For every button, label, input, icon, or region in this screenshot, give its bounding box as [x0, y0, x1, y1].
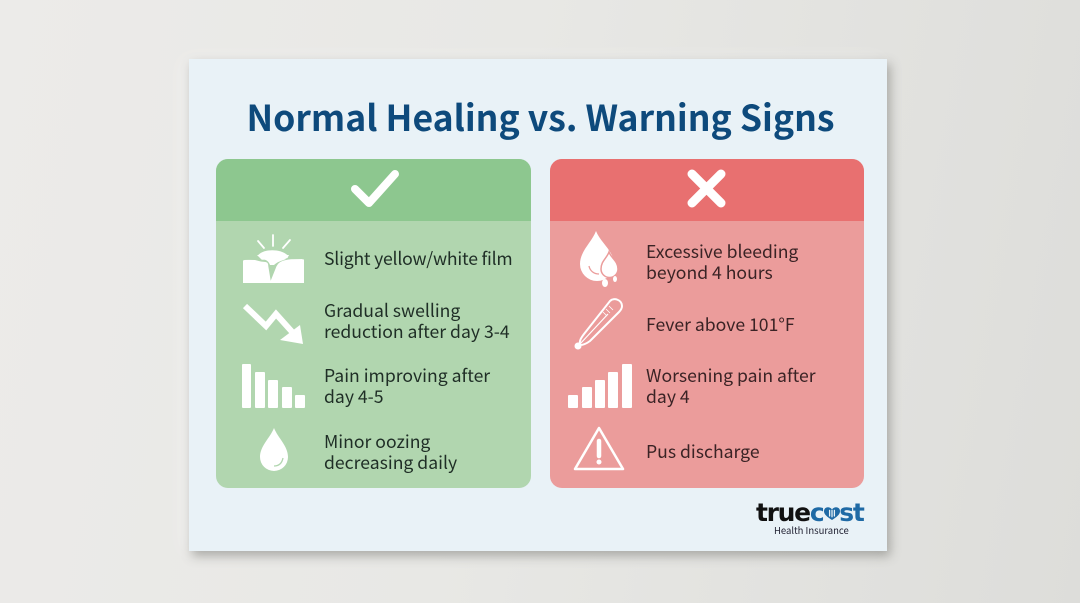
text: worsening pain: Worsening pain after — [646, 363, 816, 388]
icon: logo heart — [824, 507, 840, 520]
text: worsening pain: day 4 — [646, 384, 690, 409]
icon: wound film — [243, 234, 304, 283]
text: oozing: decreasing daily — [324, 450, 457, 475]
text: bleeding — [646, 239, 798, 285]
text: pus: Pus discharge — [646, 439, 760, 464]
icon: warning triangle — [574, 426, 624, 470]
logo tagline: Health Insurance — [774, 523, 849, 537]
title: Normal Healing vs. Warning Signs — [246, 91, 835, 142]
icon: blood drops — [580, 231, 618, 287]
text: swelling: reduction after day 3-4 — [324, 319, 510, 344]
text: worsening pain — [646, 363, 816, 409]
text: pain improving: Pain improving after — [324, 363, 490, 388]
text: pain improving: day 4-5 — [324, 384, 384, 409]
text: bleeding: Excessive bleeding — [646, 239, 798, 264]
text: pain improving — [324, 363, 490, 409]
icon: trending down arrow — [243, 304, 303, 344]
text: slight film: Slight yellow/white film — [324, 246, 513, 271]
logo wordmark: truecost — [756, 498, 864, 527]
text: swelling: Gradual swelling — [324, 298, 460, 323]
text: bleeding: beyond 4 hours — [646, 260, 773, 285]
text: oozing: Minor oozing — [324, 429, 430, 454]
icon: small drop — [260, 428, 288, 471]
text: fever: Fever above 101°F — [646, 312, 795, 337]
text: oozing — [324, 429, 457, 475]
text: swelling — [324, 298, 510, 344]
green header with checkmark — [216, 159, 531, 221]
red header with cross — [550, 159, 864, 221]
icon: descending bars — [242, 364, 305, 408]
panel: warning signs — [550, 159, 864, 488]
icon: thermometer — [574, 298, 623, 350]
icon: ascending bars — [568, 364, 632, 408]
logo: truecost — [756, 498, 864, 537]
panel: normal healing — [216, 159, 531, 488]
background card — [189, 59, 887, 551]
